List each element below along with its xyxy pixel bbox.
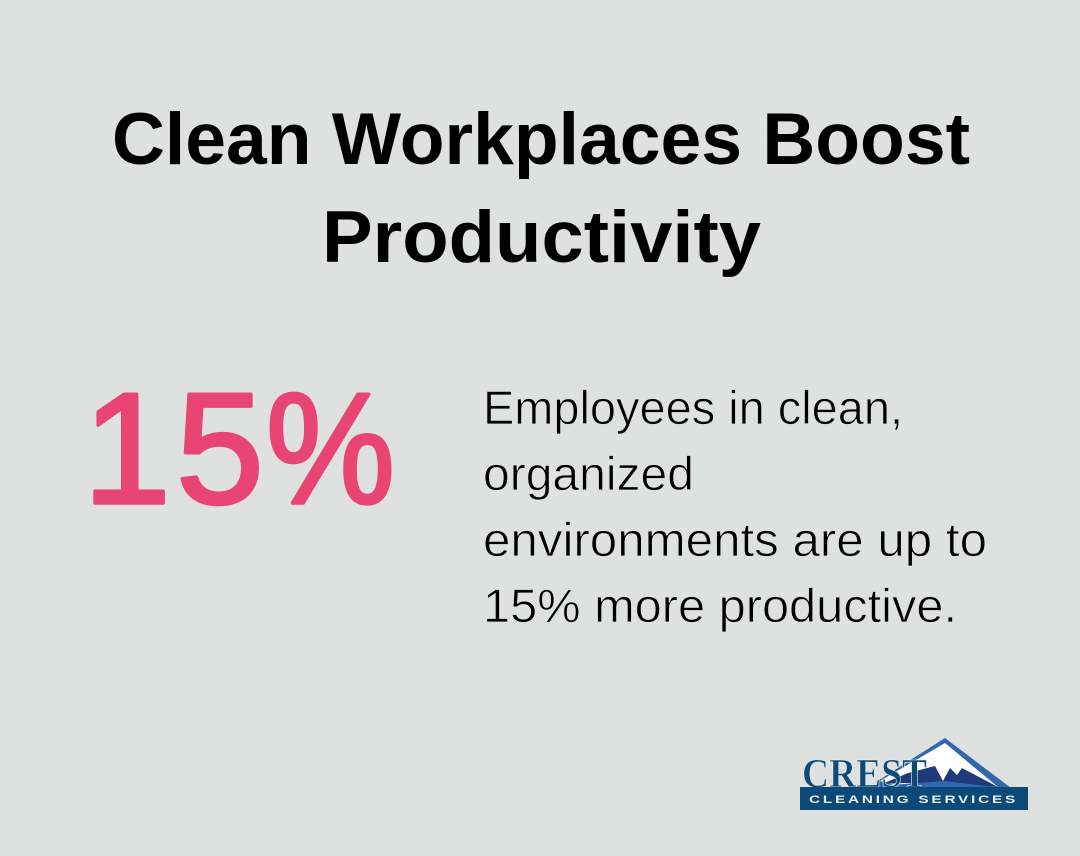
big statistic: 15%: %	[266, 361, 395, 537]
logo mountain	[876, 738, 1011, 788]
big statistic: 15%	[83, 361, 395, 537]
logo banner	[800, 787, 1028, 810]
logo wordmark: CREST	[802, 750, 927, 796]
logo tagline: CLEANING SERVICES	[809, 794, 1018, 806]
big statistic: 15%: 5	[176, 361, 264, 537]
title	[112, 99, 970, 278]
description text: environments are up to	[483, 513, 987, 566]
big statistic: 15%: 1	[83, 361, 171, 537]
description text: organized	[483, 447, 694, 500]
description text	[483, 381, 987, 632]
title: Productivity	[322, 197, 761, 278]
logo: Crest Cleaning Services	[800, 738, 1028, 810]
description text: Employees in clean,	[483, 381, 903, 434]
title: Clean Workplaces Boost	[112, 99, 970, 180]
description text: 15% more productive.	[483, 579, 957, 632]
